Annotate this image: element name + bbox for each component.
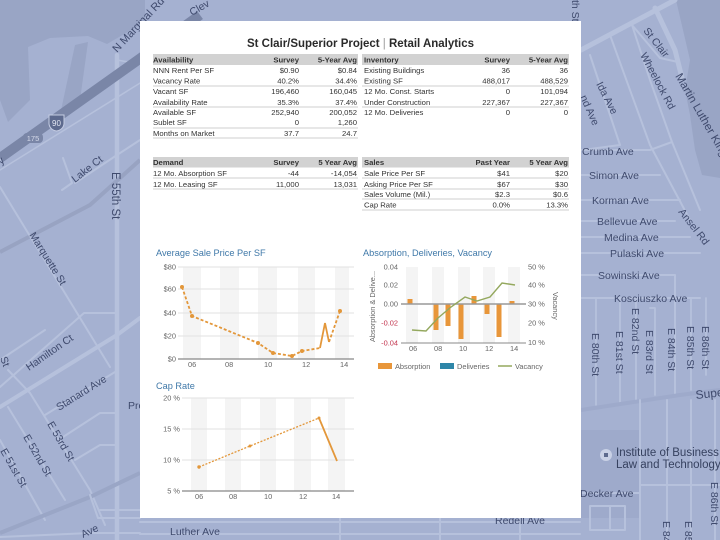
table: inventory: Inventory — [364, 56, 399, 64]
map: right street labels: St Clair — [641, 25, 672, 60]
chart: average sale price per SF: 10 — [264, 360, 272, 369]
map: bottom street labels — [79, 515, 545, 540]
title: St Clair/Superior Project | Retail Analytics — [247, 38, 474, 50]
map: right street labels: E 83rd St — [643, 330, 655, 374]
table: inventory: Existing Buildings — [364, 66, 424, 75]
table: availability: Availability — [153, 56, 194, 64]
map: bottom street labels: Luther Ave — [170, 526, 220, 538]
legend — [378, 362, 543, 371]
chart: average sale price per SF: $40 — [164, 308, 176, 318]
chart: average sale price per SF: $60 — [164, 284, 176, 294]
table: inventory: 0 — [564, 108, 568, 117]
price line — [180, 285, 342, 358]
chart: cap rate: 08 — [229, 492, 237, 501]
map: left street labels: E 55th St — [109, 172, 121, 220]
table: availability: Availability Rate — [153, 98, 208, 107]
chart: absorption, deliveries, vacancy: -0.02 — [381, 318, 398, 328]
table: demand: 5 Year Avg — [318, 158, 357, 167]
table: availability: Vacancy Rate — [153, 76, 200, 86]
map: right street labels: E 81st St — [613, 331, 625, 374]
map: right street labels: Medina Ave — [604, 232, 659, 244]
table: demand: Survey — [273, 158, 300, 167]
map: right street labels: E 86th St — [699, 326, 711, 369]
table: inventory: 488,529 — [540, 76, 568, 86]
table: availability: $0.90 — [280, 66, 299, 75]
map: right street labels: E 86th St — [708, 482, 720, 525]
map: right street labels: Pulaski Ave — [610, 248, 664, 260]
chart: absorption, deliveries, vacancy: 06 — [409, 344, 417, 353]
map: left street labels: Stanard Ave — [54, 373, 109, 414]
table: availability: 40.2% — [277, 76, 299, 86]
table: availability: 160,045 — [329, 87, 357, 96]
chart: absorption, deliveries, vacancy: 14 — [510, 344, 518, 353]
chart: average sale price per SF: $20 — [164, 332, 176, 340]
map: left street labels: E 52nd St — [20, 432, 54, 479]
table: inventory: 5-Year Avg — [529, 56, 568, 64]
table: sales: 13.3% — [546, 200, 568, 210]
map: right street labels: Simon Ave — [589, 170, 639, 182]
chart: absorption, deliveries, vacancy: 30 % — [528, 300, 545, 308]
table: availability: Survey — [273, 56, 300, 64]
table: inventory: Survey — [484, 56, 511, 64]
map: left street labels: Lake Ct — [69, 154, 105, 185]
chart: absorption, deliveries, vacancy: 10 % — [528, 338, 545, 347]
map: right street labels — [577, 25, 720, 540]
map: right street labels: Ida Ave — [593, 80, 620, 117]
table: sales: Sales — [364, 158, 384, 167]
chart: cap rate: 10 — [264, 492, 272, 501]
chart: cap rate: 12 — [299, 492, 307, 501]
map: top street labels: th St — [569, 0, 581, 22]
table: demand: -44 — [288, 169, 300, 178]
chart: absorption, deliveries, vacancy: 50 % — [528, 262, 545, 272]
table: inventory: 12 Mo. Const. Starts — [364, 87, 434, 96]
table: inventory: Under Construction — [364, 98, 430, 107]
chart: absorption, deliveries, vacancy: -0.04 — [381, 338, 398, 348]
map: top street labels — [110, 0, 581, 55]
absorption bars — [408, 296, 514, 339]
table: availability: 24.7 — [342, 129, 357, 138]
chart: absorption, deliveries, vacancy: 12 — [485, 344, 493, 353]
table: inventory: 227,367 — [540, 98, 568, 107]
chart: cap rate: 06 — [195, 492, 203, 501]
chart: average sale price per SF: 06 — [188, 360, 196, 369]
map: highway shields — [23, 115, 64, 143]
table: availability: 200,052 — [329, 108, 357, 117]
table: sales: 5 Year Avg — [529, 158, 568, 167]
chart: absorption, deliveries, vacancy: Absorption, Deliveries, Vacancy — [363, 248, 492, 258]
chart: absorption, deliveries, vacancy: 0.00 — [384, 300, 398, 308]
map: right street labels: Crumb Ave — [582, 146, 634, 158]
map: highway shields: 90 — [52, 119, 61, 128]
legend: Vacancy — [515, 362, 543, 371]
map: institute marker: Law and Technology — [616, 459, 720, 471]
table: demand — [153, 157, 358, 189]
table: availability: 1,260 — [338, 118, 357, 127]
chart: average sale price per SF: 08 — [225, 360, 233, 369]
chart: cap rate: 5 % — [167, 486, 180, 496]
chart: absorption, deliveries, vacancy: 0.04 — [384, 262, 398, 272]
table: availability: 37.7 — [284, 129, 299, 138]
chart: absorption, deliveries, vacancy: 10 — [459, 344, 467, 353]
map: left street labels: Hamilton Ct — [24, 332, 76, 373]
map: right street labels: E 82nd St — [629, 308, 641, 354]
map: left street labels — [0, 154, 145, 489]
table: availability: 37.4% — [335, 98, 357, 107]
table: availability: $0.84 — [338, 66, 358, 75]
table: sales: $2.3 — [495, 190, 510, 199]
chart: cap rate — [156, 381, 354, 501]
table: sales: $67 — [497, 180, 510, 189]
chart: average sale price per SF: 14 — [340, 360, 348, 369]
table: sales: Past Year — [476, 158, 510, 167]
chart: cap rate: 15 % — [163, 424, 180, 434]
map: right street labels: E 84th St — [665, 328, 677, 371]
table: availability: 5-Year Avg — [318, 56, 357, 64]
legend: Absorption — [395, 362, 430, 371]
map: right street labels: Ansel Rd — [676, 206, 711, 248]
chart: average sale price per SF: 12 — [302, 360, 310, 369]
chart: cap rate: 20 % — [163, 394, 180, 402]
map: right street labels: Wheelock Rd — [637, 51, 677, 112]
table: sales: $0.6 — [553, 190, 568, 199]
chart: absorption, deliveries, vacancy: Absorption & Delive... — [368, 271, 377, 342]
table: inventory: 36 — [501, 66, 510, 75]
chart: cap rate: 14 — [332, 492, 340, 501]
map: right street labels: Decker Ave — [580, 488, 634, 500]
chart: absorption, deliveries, vacancy: 20 % — [528, 318, 545, 328]
chart: average sale price per SF: Average Sale Price Per SF — [156, 248, 266, 258]
table: demand: 13,031 — [333, 180, 357, 189]
table: inventory — [362, 54, 569, 117]
table: inventory: 101,094 — [540, 87, 569, 96]
table: sales: Sales Volume (Mil.) — [364, 190, 431, 199]
table: availability: Months on Market — [153, 129, 215, 138]
chart: absorption, deliveries, vacancy: 40 % — [528, 280, 545, 290]
chart: cap rate: 10 % — [163, 456, 180, 464]
table: sales: 0.0% — [492, 200, 510, 210]
map: left street labels: E 53rd St — [44, 420, 77, 463]
chart: cap rate: Cap Rate — [156, 381, 195, 391]
table: sales: $30 — [555, 180, 568, 189]
legend: Deliveries — [457, 362, 490, 371]
table: availability: 196,460 — [271, 87, 299, 96]
table: inventory: 0 — [506, 108, 510, 117]
table: inventory: 488,017 — [482, 76, 510, 86]
table: inventory: 0 — [506, 87, 510, 96]
table: availability — [153, 54, 358, 138]
white report panel — [140, 21, 581, 518]
table: sales: Asking Price Per SF — [364, 180, 433, 189]
table: availability: 0 — [295, 118, 299, 127]
chart: absorption, deliveries, vacancy — [363, 248, 560, 371]
table: sales — [362, 157, 569, 210]
table: availability: 252,940 — [271, 108, 299, 117]
map: right street labels: E 80th St — [589, 333, 601, 376]
table: availability: NNN Rent Per SF — [153, 66, 214, 75]
map: institute marker — [600, 447, 720, 471]
table: sales: Cap Rate — [364, 200, 396, 210]
table: inventory: 12 Mo. Deliveries — [364, 108, 424, 117]
map: right street labels: nd Ave — [577, 93, 601, 128]
map: highway shields: 175 — [27, 134, 39, 143]
map: right street labels: Korman Ave — [592, 195, 649, 207]
table: demand: -14,054 — [331, 169, 358, 178]
table: availability: Sublet SF — [153, 118, 187, 127]
map: left street labels: Marquette St — [26, 230, 69, 288]
chart: average sale price per SF: $0 — [168, 354, 176, 364]
chart: absorption, deliveries, vacancy: Vacancy — [551, 292, 560, 320]
map: left street labels: Pro — [128, 400, 144, 412]
table: availability: 34.4% — [335, 76, 357, 86]
vacancy line — [412, 283, 515, 331]
chart: average sale price per SF — [156, 248, 354, 369]
map: right street labels: Bellevue Ave — [597, 216, 658, 228]
table: availability: Vacant SF — [153, 87, 189, 96]
table: demand: 12 Mo. Leasing SF — [153, 180, 218, 189]
table: availability: Available SF — [153, 108, 196, 117]
table: sales: $41 — [497, 169, 510, 178]
table: sales: $20 — [555, 169, 568, 178]
chart: absorption, deliveries, vacancy: 0.02 — [384, 280, 398, 290]
table: demand: 12 Mo. Absorption SF — [153, 169, 227, 178]
table: availability: 35.3% — [277, 98, 299, 107]
table: sales: Sale Price Per SF — [364, 169, 425, 178]
map: right street labels: Sowinski Ave — [598, 270, 660, 282]
table: inventory: 227,367 — [482, 98, 510, 107]
table: inventory: Existing SF — [364, 76, 403, 86]
table: demand: 11,000 — [276, 180, 299, 189]
cap rate line — [197, 416, 337, 469]
table: demand: Demand — [153, 158, 184, 167]
table: inventory: 36 — [559, 66, 568, 75]
map: right street labels: E 85th St — [684, 326, 696, 369]
chart: absorption, deliveries, vacancy: 08 — [434, 344, 442, 353]
chart: average sale price per SF: $80 — [164, 262, 176, 272]
map: institute marker: Institute of Business — [616, 447, 719, 459]
map: right street labels: Kosciuszko Ave — [614, 293, 688, 305]
map: bottom street labels: Redell Ave — [495, 515, 545, 527]
